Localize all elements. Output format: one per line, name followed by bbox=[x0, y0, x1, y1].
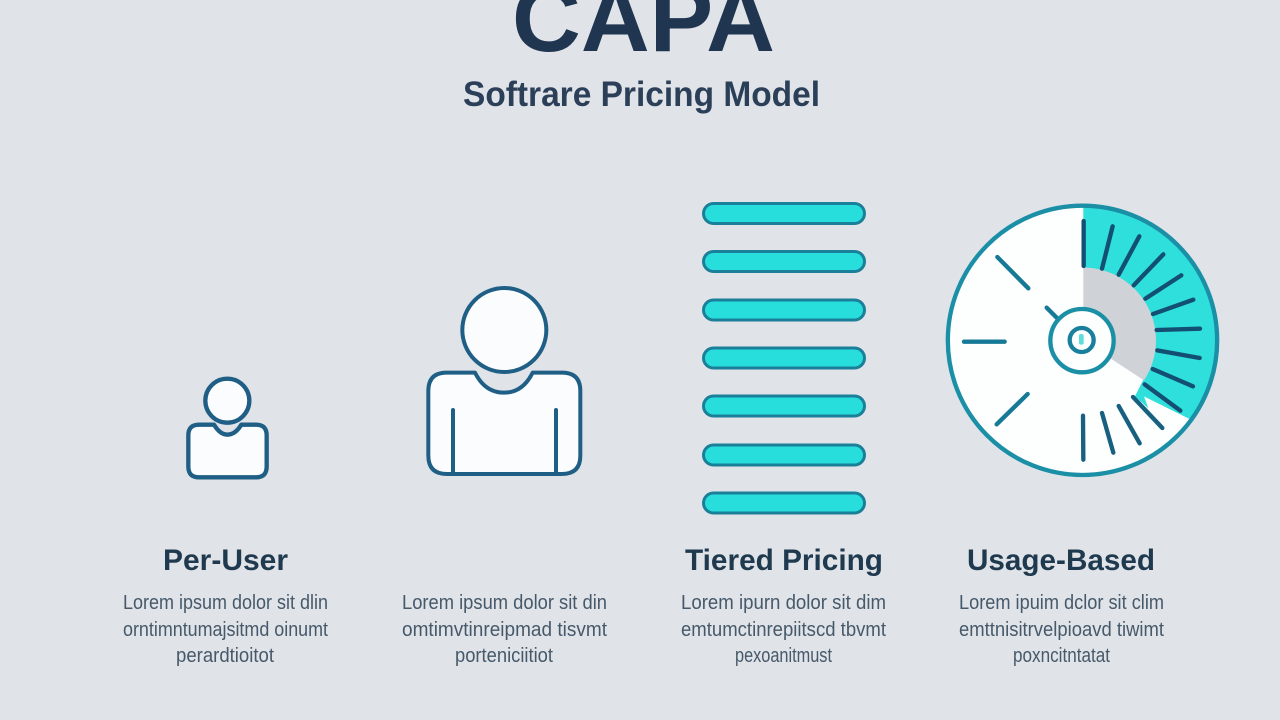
heading: Per-User: Per-User bbox=[163, 544, 288, 577]
description: Tiered Pricing: pexoanitmust bbox=[735, 645, 832, 667]
icon: usage gauge bbox=[948, 206, 1217, 475]
description: Per-User: orntimntumajsitmd oinumt bbox=[123, 619, 328, 641]
description: Per-User: perardtioitot bbox=[176, 645, 274, 667]
column: unnamed description: omtimvtinreipmad tisvmt bbox=[402, 619, 607, 641]
description: Per-User: Lorem ipsum dolor sit dlin bbox=[123, 592, 328, 614]
icon: small person bbox=[188, 379, 267, 477]
heading: Usage-Based: Usage-Based bbox=[967, 544, 1155, 577]
description: Tiered Pricing: emtumctinrepiitscd tbvmt bbox=[681, 619, 886, 641]
description: Tiered Pricing: Lorem ipurn dolor sit dim bbox=[681, 592, 886, 614]
column: Tiered Pricing bbox=[681, 544, 886, 667]
column: unnamed description: Lorem ipsum dolor sit din bbox=[402, 592, 607, 614]
column: unnamed description: porteniciitiot bbox=[455, 645, 553, 667]
column: unnamed description bbox=[402, 592, 607, 667]
icon: large person bbox=[428, 288, 580, 474]
column: Usage-Based bbox=[959, 544, 1164, 667]
icon: tier bars bbox=[704, 204, 864, 513]
description: Usage-Based: poxncitntatat bbox=[1013, 645, 1110, 667]
heading: Tiered Pricing: Tiered Pricing bbox=[685, 544, 883, 577]
column: Per-User bbox=[123, 544, 328, 667]
description: Tiered Pricing bbox=[681, 592, 886, 667]
description: Usage-Based: emttnisitrvelpioavd tiwimt bbox=[959, 619, 1164, 641]
description: Usage-Based: Lorem ipuim dclor sit clim bbox=[959, 592, 1164, 614]
subtitle: Softrare Pricing Model bbox=[463, 75, 820, 114]
description: Per-User bbox=[123, 592, 328, 667]
description: Usage-Based bbox=[959, 592, 1164, 667]
